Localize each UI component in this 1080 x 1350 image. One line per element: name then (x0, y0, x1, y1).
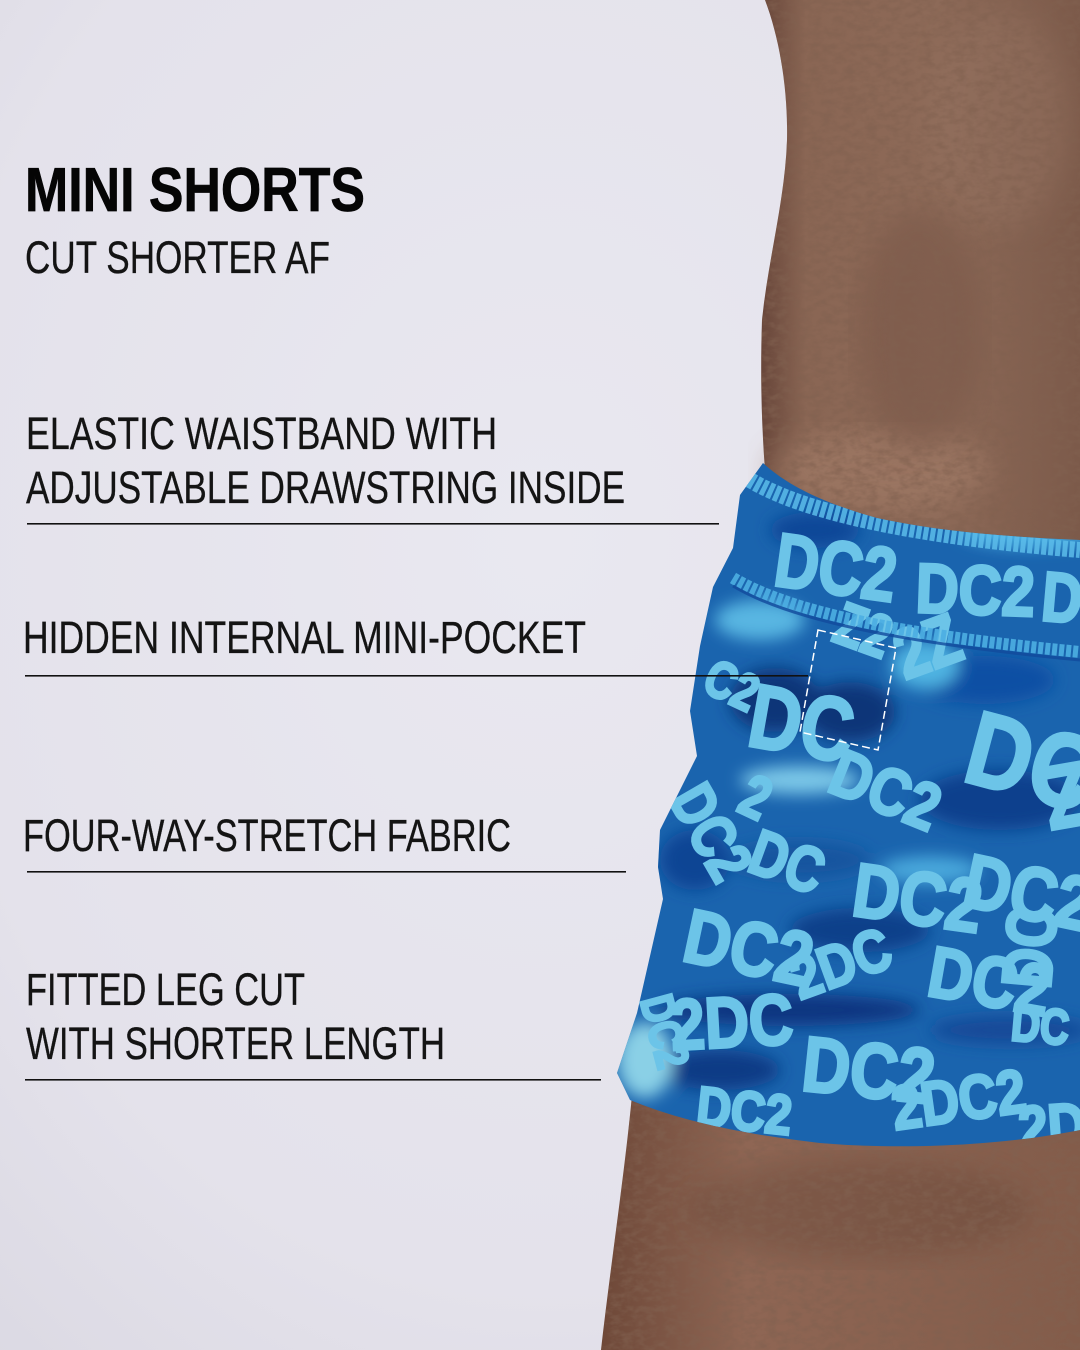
photo: patterned shorts (600, 450, 1080, 1164)
callout: waistband: ADJUSTABLE DRAWSTRING INSIDE (26, 462, 625, 513)
fabric print: DC2 logos: 2DC (669, 980, 795, 1066)
skin hair texture (605, 0, 983, 1350)
callout: leg cut: WITH SHORTER LENGTH (26, 1018, 445, 1069)
fabric print: DC2 logos: Z2 (825, 589, 901, 672)
callout: leg cut: FITTED LEG CUT (26, 964, 305, 1015)
callout: waistband: ELASTIC WAISTBAND WITH (26, 408, 497, 459)
fabric print: DC2 logos: DC2 (914, 548, 1036, 631)
fabric print: DC2 logos: DC2 (677, 893, 821, 1003)
fabric print: DC2 logos: 2DC2 (887, 1057, 1030, 1144)
photo: torso (761, 0, 1080, 600)
fabric print: DC2 logos: DC (1009, 995, 1071, 1056)
callout: pocket: HIDDEN INTERNAL MINI-POCKET (23, 612, 586, 663)
fabric print: DC2 logos: C2 (695, 647, 768, 722)
fabric print: DC2 logos: DC2 (694, 1076, 795, 1148)
subtitle: CUT SHORTER AF (25, 232, 330, 283)
photo: leg (601, 1095, 1080, 1350)
fabric print: DC2 logos: 2Z (884, 600, 972, 695)
fabric print: DC2 logos (630, 517, 1080, 1164)
callout: fabric: FOUR-WAY-STRETCH FABRIC (23, 810, 511, 861)
fabric print: DC2 logos: DC2 (657, 772, 766, 893)
fabric print: DC2 logos: DC (988, 904, 1072, 991)
fabric print: DC2 logos: 2 (729, 761, 782, 833)
fabric print: DC2 logos: DC2 (798, 1020, 939, 1121)
fabric print: DC2 logos: DC2 (630, 989, 700, 1074)
fabric print: DC2 logos: DC2 (820, 735, 951, 845)
fabric print: DC2 logos: DC2 (770, 517, 902, 618)
callout: waistband (26, 408, 719, 525)
callout: leg cut (25, 964, 601, 1081)
fabric print: DC2 logos: 2DC (782, 914, 900, 1012)
fabric print: DC2 logos: DC (740, 817, 834, 909)
fabric print: DC2 logos: DC (742, 666, 861, 783)
pocket outline (800, 630, 896, 750)
fabric print: DC2 logos: DC2 (922, 932, 1057, 1032)
fabric print: DC2 logos: DC2 (848, 847, 988, 949)
waistband elastic (750, 480, 1080, 550)
title: MINI SHORTS (25, 156, 365, 225)
